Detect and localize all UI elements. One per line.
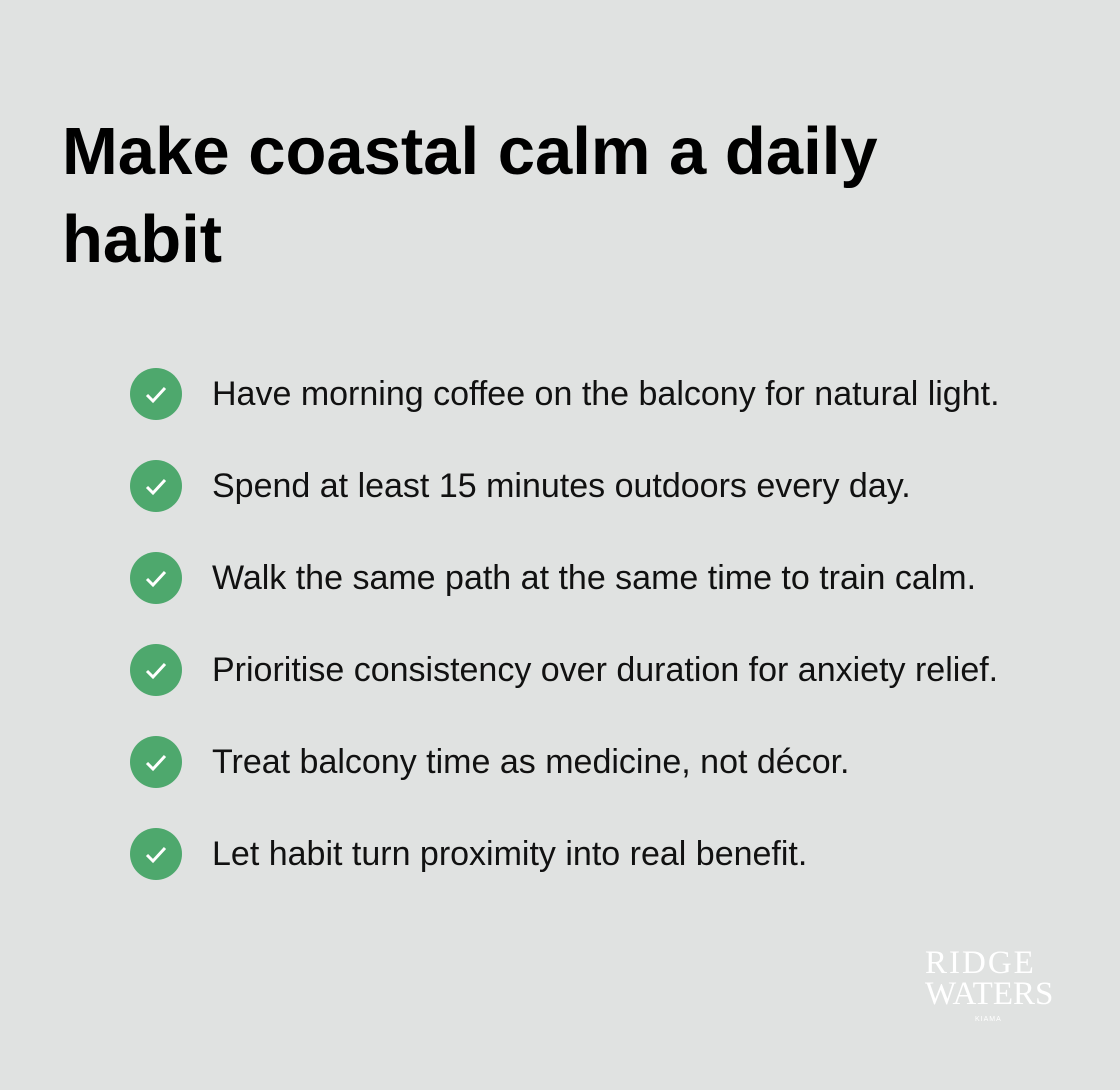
item 5: Treat balcony time as medicine, not décor.: [212, 743, 850, 781]
item 6: Let habit turn proximity into real benefit.: [212, 835, 807, 873]
logo: WATERS: [925, 976, 1053, 1012]
item 6: [130, 828, 807, 880]
item 3: Walk the same path at the same time to train calm.: [212, 559, 976, 597]
item 2: Spend at least 15 minutes outdoors every day.: [212, 467, 911, 505]
item 5: [130, 736, 850, 788]
item 1: [130, 368, 1000, 420]
logo: KIAMA: [975, 1016, 1002, 1023]
logo: RIDGE: [925, 945, 1036, 981]
item 1: Have morning coffee on the balcony for natural light.: [212, 375, 1000, 413]
item 4: Prioritise consistency over duration for anxiety relief.: [212, 651, 998, 689]
item 2: [130, 460, 911, 512]
item 4: [130, 644, 998, 696]
logo: [925, 945, 1053, 1023]
title: Make coastal calm a daily habit: [62, 114, 878, 277]
item 3: [130, 552, 976, 604]
